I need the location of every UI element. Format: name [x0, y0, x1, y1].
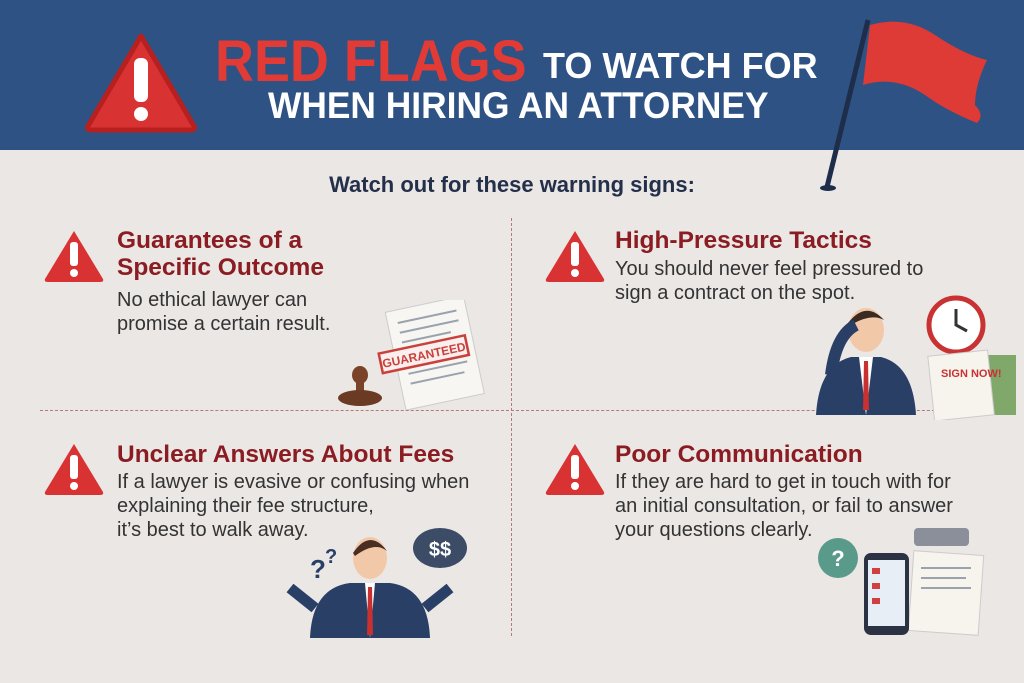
text: No ethical lawyer can — [117, 289, 307, 311]
illustration: stressed man, clock, sign now: SIGN NOW! — [941, 368, 1002, 380]
icon: warning — [546, 444, 604, 495]
panel: high pressure — [546, 227, 1016, 420]
icon: warning — [546, 231, 604, 282]
title: WHEN HIRING AN ATTORNEY — [268, 85, 769, 126]
text — [117, 471, 469, 541]
heading: Unclear Answers About Fees — [117, 441, 454, 468]
illustration: confused man with $$: ? — [325, 546, 337, 568]
text: it’s best to walk away. — [117, 519, 309, 541]
header band — [0, 0, 1024, 150]
text: sign a contract on the spot. — [615, 282, 855, 304]
subtitle: Watch out for these warning signs: — [329, 172, 695, 197]
text — [117, 289, 330, 335]
text: If a lawyer is evasive or confusing when — [117, 471, 469, 493]
text: explaining their fee structure, — [117, 495, 374, 517]
illustration: stressed man, clock, sign now — [816, 296, 1016, 420]
heading: Poor Communication — [615, 441, 863, 468]
icon: warning — [44, 444, 104, 495]
icon: red flag on pole — [820, 20, 987, 191]
title: RED FLAGS — [215, 29, 527, 94]
illustration: guaranteed document and stamp — [338, 300, 485, 410]
panel: communication — [546, 441, 984, 636]
illustration: guaranteed document and stamp: GUARANTEED — [381, 339, 467, 371]
text — [615, 258, 923, 304]
icon: header warning triangle — [84, 34, 197, 132]
heading: High-Pressure Tactics — [615, 227, 872, 254]
panel: fees — [44, 441, 469, 638]
text: an initial consultation, or fail to answer — [615, 495, 953, 517]
title: TO WATCH FOR — [543, 45, 818, 86]
illustration: confused man with $$: ? — [310, 554, 326, 584]
panel: guarantees — [44, 227, 485, 410]
illustration: confused man with $$: $$ — [429, 539, 451, 561]
heading: Guarantees of a — [117, 227, 302, 254]
heading — [117, 227, 324, 281]
illustration: phone, chat bubbles, document — [818, 528, 984, 636]
heading: Specific Outcome — [117, 254, 324, 281]
text: your questions clearly. — [615, 519, 812, 541]
dividers — [511, 218, 512, 636]
text — [615, 471, 953, 541]
illustration: phone, chat bubbles, document: ? — [831, 546, 845, 571]
illustration: confused man with $$ — [286, 528, 467, 638]
text: promise a certain result. — [117, 313, 330, 335]
title — [215, 29, 818, 126]
icon: warning — [44, 231, 104, 282]
text: You should never feel pressured to — [615, 258, 923, 280]
text: If they are hard to get in touch with for — [615, 471, 951, 493]
